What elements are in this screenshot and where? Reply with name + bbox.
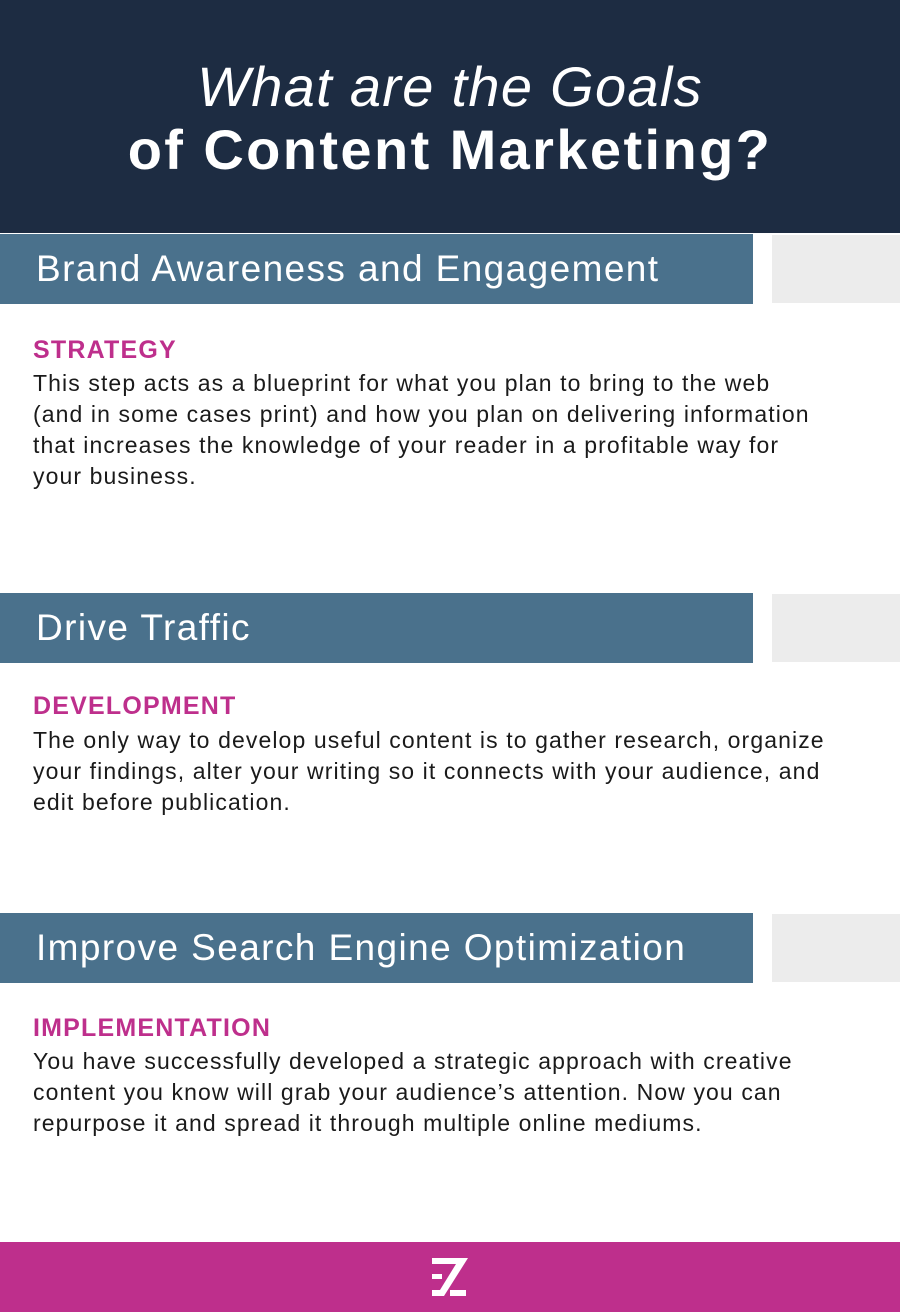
gray tab 2 (772, 594, 900, 662)
band: SEO: Improve Search Engine Optimization (36, 927, 686, 968)
text: strategy: your business. (33, 463, 197, 489)
gray tab 1 (772, 235, 900, 303)
band: brand awareness: Brand Awareness and Engagement (36, 248, 659, 289)
title line 2: of Content Marketing? (128, 118, 772, 181)
text: development: your findings, alter your writing so it connects with your audience, and (33, 758, 820, 784)
band: SEO (0, 913, 753, 983)
text: strategy: that increases the knowledge of your reader in a profitable way for (33, 432, 779, 458)
header (0, 0, 900, 233)
text: implementation: content you know will grab your audience’s attention. Now you can (33, 1079, 782, 1105)
band: brand awareness (0, 234, 753, 304)
text: development: The only way to develop useful content is to gather research, organize (33, 727, 825, 753)
text: development (33, 727, 825, 815)
heading: strategy: STRATEGY (33, 336, 177, 364)
heading: implementation: IMPLEMENTATION (33, 1014, 271, 1042)
footer (0, 1242, 900, 1312)
icon: Z logo (432, 1258, 468, 1296)
text: implementation: You have successfully developed a strategic approach with creative (33, 1048, 793, 1074)
text: implementation (33, 1048, 793, 1136)
text: implementation: repurpose it and spread it through multiple online mediums. (33, 1110, 703, 1136)
title line 1: What are the Goals (197, 55, 703, 118)
text: strategy (33, 370, 810, 489)
text: strategy: This step acts as a blueprint for what you plan to bring to the web (33, 370, 770, 396)
text: strategy: (and in some cases print) and how you plan on delivering information (33, 401, 810, 427)
heading: development: DEVELOPMENT (33, 692, 236, 720)
band: drive traffic: Drive Traffic (36, 607, 251, 648)
band: drive traffic (0, 593, 753, 663)
gray tab 3 (772, 914, 900, 982)
text: development: edit before publication. (33, 789, 291, 815)
